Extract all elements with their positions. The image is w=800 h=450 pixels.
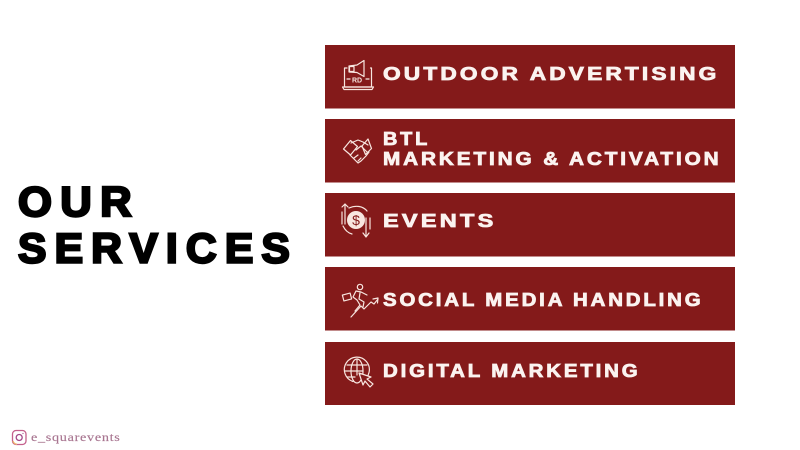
panel: social media handling — [325, 267, 735, 330]
title: our services — [18, 178, 298, 272]
panel: outdoor advertising — [325, 45, 735, 108]
label: e_squarevents: e_squarevents — [31, 430, 120, 444]
icon: globe with cursor — [344, 357, 373, 387]
icon: handshake — [344, 139, 372, 163]
icon: laptop with megaphone: RD — [352, 78, 362, 84]
label: digital marketing: DIGITAL MARKETING — [383, 361, 640, 381]
icon: instagram — [12, 430, 26, 444]
panel: digital marketing — [325, 342, 735, 405]
icon: laptop with megaphone — [342, 60, 374, 90]
instagram handle — [12, 430, 120, 444]
label: btl: BTL — [383, 129, 430, 149]
label: outdoor advertising: OUTDOOR ADVERTISING — [383, 64, 720, 84]
icon: dollar coin with arrows: $ — [352, 212, 360, 228]
title: our services: OUR — [18, 178, 140, 225]
icon: running businessman on rising arrow — [342, 284, 378, 317]
label: social media handling: SOCIAL MEDIA HANDLING — [383, 290, 704, 310]
label: events: EVENTS — [383, 211, 496, 231]
title: our services: SERVICES — [18, 224, 298, 272]
label: marketing and activation: MARKETING & ACTIVATION — [383, 149, 722, 169]
panel: events — [325, 193, 735, 256]
panel: btl marketing and activation — [325, 119, 735, 182]
icon: dollar coin with arrows — [342, 204, 370, 237]
